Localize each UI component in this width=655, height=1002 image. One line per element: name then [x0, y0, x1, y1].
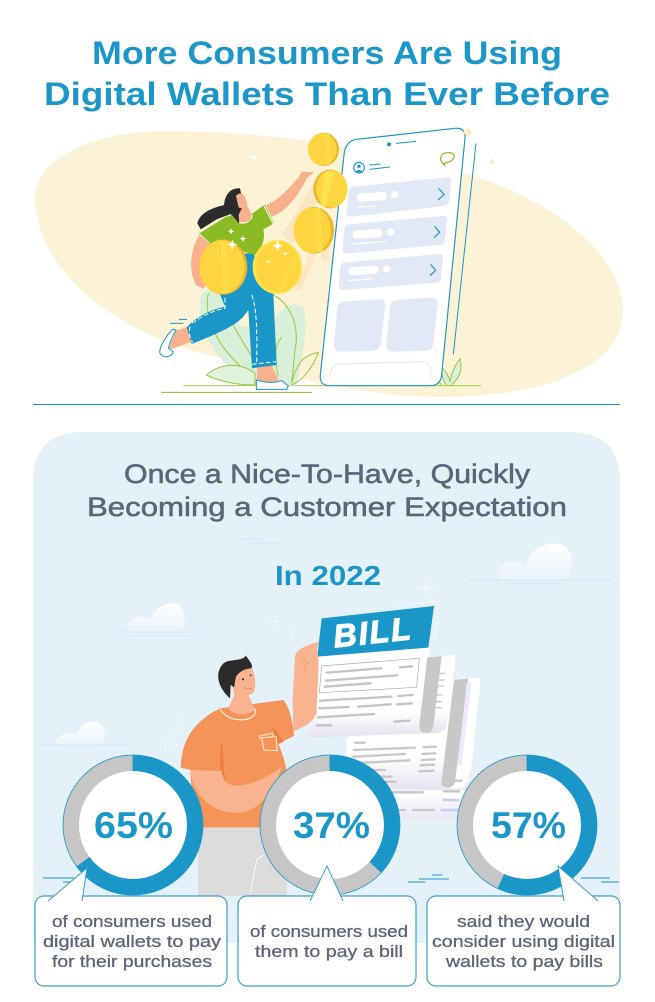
raised arm — [266, 172, 314, 217]
raised arm — [293, 642, 319, 731]
front bill — [308, 647, 455, 737]
coin: second — [313, 170, 347, 208]
background blob: pale yellow — [35, 131, 623, 397]
yellow diamonds — [463, 127, 495, 165]
near arm — [190, 767, 282, 813]
donut: 65%: 65% — [94, 805, 173, 846]
neck — [228, 693, 255, 714]
face — [236, 194, 247, 208]
panel heading: Once a Nice-To-Have, Quickly — [124, 459, 531, 489]
shirt — [181, 700, 294, 827]
callout: 57%: said they would — [457, 912, 590, 931]
callout: 65%: digital wallets to pay — [43, 932, 222, 951]
panel heading: Becoming a Customer Expectation — [87, 492, 567, 522]
plants behind woman — [200, 290, 461, 386]
title: Digital Wallets Than Ever Before — [44, 76, 610, 112]
title — [44, 35, 610, 112]
bill header — [317, 606, 434, 657]
callout: 57% — [427, 866, 620, 986]
pocket — [259, 733, 277, 751]
callout: 37% — [238, 866, 416, 986]
phone — [320, 128, 476, 386]
sparkles above bill — [416, 578, 436, 598]
callout: 65%: of consumers used — [52, 912, 212, 931]
callout: 65% — [35, 868, 227, 986]
donut: 37% — [260, 755, 400, 895]
coin trail beams — [282, 183, 333, 292]
section divider — [33, 404, 620, 406]
coin: top — [308, 133, 339, 166]
ground lines — [161, 386, 481, 392]
bill header: BILL — [332, 610, 412, 654]
callout: 57%: consider using digital — [432, 932, 615, 951]
neck — [235, 205, 252, 224]
sparkles — [269, 602, 438, 642]
callout: 57%: wallets to pay bills — [445, 952, 603, 971]
illustration: woman collecting coins from phone — [160, 127, 495, 392]
jeans — [187, 253, 277, 368]
woman — [160, 172, 314, 389]
back leg and shoe — [168, 327, 192, 349]
donut: 57%: 57% — [491, 805, 566, 846]
panel: customer expectation — [33, 432, 620, 943]
near arm — [191, 235, 214, 289]
far leg skin and shoe — [257, 365, 280, 383]
callout: 37%: of consumers used — [250, 922, 408, 941]
callout: 37%: them to pay a bill — [255, 942, 403, 961]
sparkles — [228, 148, 257, 242]
rear receipt — [347, 678, 480, 820]
trousers — [198, 823, 287, 896]
coin: held right — [253, 240, 302, 294]
clouds — [40, 539, 610, 745]
man — [181, 642, 319, 896]
callout: 65%: for their purchases — [52, 952, 212, 971]
wind lines — [43, 875, 619, 882]
donut: 37%: 37% — [293, 805, 370, 846]
donut: 65% — [63, 755, 203, 895]
shirt — [198, 205, 274, 255]
hair — [218, 656, 252, 698]
phone list cards — [334, 177, 451, 352]
panel heading — [87, 459, 567, 522]
coin: third — [294, 207, 334, 254]
year label: In 2022 — [275, 560, 381, 591]
illustration: man holding up a bill — [166, 602, 480, 896]
hair — [197, 188, 243, 229]
donut: 57% — [457, 755, 597, 895]
motion lines — [166, 713, 184, 753]
coin: held left — [199, 239, 247, 295]
title: More Consumers Are Using — [92, 35, 562, 71]
face — [231, 666, 255, 696]
